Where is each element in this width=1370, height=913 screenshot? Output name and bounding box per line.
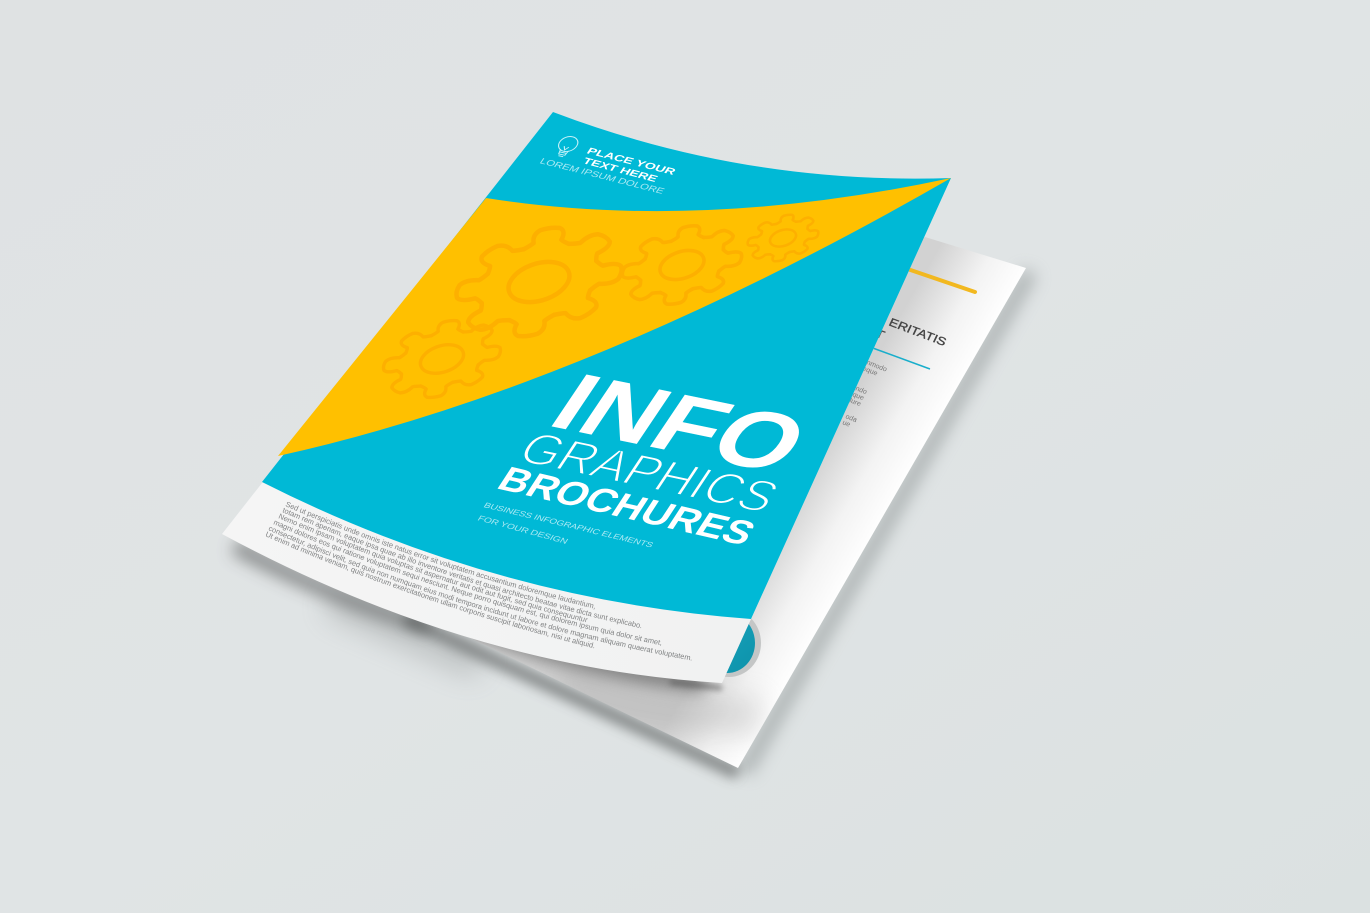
- panel: front sheet: [222, 112, 951, 683]
- floor shadows: [235, 272, 1030, 773]
- panel: back sheet: [474, 237, 1026, 768]
- small text fragments: ut.: [895, 280, 901, 287]
- heading fragment: [873, 317, 948, 349]
- body copy: Ut enim ad minima veniam, quis nostrum exercitationem ullam corporis suscipit laboriosam, nisi ut aliquid.: [266, 532, 594, 648]
- gear: lower left: [382, 319, 502, 399]
- small text fragments: ndo: [854, 385, 868, 396]
- small text fragments: nmodo: [865, 359, 888, 374]
- title: [490, 358, 825, 553]
- heading fragment: ERITATIS: [887, 317, 948, 349]
- small text fragments: lure: [848, 397, 862, 408]
- body copy: consectetur, adipisci velit, sed quia non numquam eius modi tempora incidunt ut labore et dolore magnam aliquam quaerat voluptatem.: [268, 527, 692, 660]
- subtitle: FOR YOUR DESIGN: [476, 514, 570, 545]
- small text fragments: eque: [861, 365, 879, 377]
- header text: PLACE YOUR: [584, 146, 677, 177]
- cover blue area: [262, 112, 951, 619]
- header text: [538, 146, 677, 196]
- gear: medium: [622, 224, 744, 306]
- body copy: magni dolores eos qui ratione voluptatem sequi nesciunt. Neque porro quisquam est, qui dolorem ipsum quia dolor sit amet,: [274, 520, 662, 646]
- body copy: Sed ut perspiciatis unde omnis iste natus error sit voluptatem accusantium doloremque laudantium,: [286, 502, 595, 610]
- header text: LOREM IPSUM DOLORE: [538, 156, 666, 196]
- body copy: Nemo enim ipsam voluptatem quia voluptas sit aspernatur aut odit aut fugit, sed quia consequuntur: [278, 514, 588, 622]
- small text fragments: que: [851, 391, 865, 402]
- yellow swoosh band: [278, 178, 951, 456]
- icon: light bulb: [552, 135, 581, 158]
- title: GRAPHICS: [509, 423, 789, 522]
- small text fragments: ue: [841, 419, 851, 429]
- heading fragment: T: [873, 328, 887, 342]
- shadow cast by front sheet: [471, 638, 768, 743]
- gears: [382, 214, 820, 399]
- brochure mockup scene: [222, 112, 1040, 786]
- title: INFO: [534, 358, 825, 490]
- gear: small: [746, 214, 820, 262]
- sheet paper and white footer strip: [222, 112, 951, 683]
- small text fragments: [841, 280, 901, 429]
- gear: large: [454, 226, 623, 338]
- small text fragments: oda: [844, 413, 858, 424]
- accent line: blue: [870, 347, 930, 369]
- header text: TEXT HERE: [580, 156, 660, 185]
- body copy: totam rem aperiam, eaque ipsa quae ab illo inventore veritatis et quasi architecto beatae vitae dicta sunt explicabo.: [282, 508, 642, 628]
- icon: teal die-cut circle: [697, 609, 761, 677]
- accent bar: yellow: [890, 263, 975, 292]
- subtitle: BUSINESS INFOGRAPHIC ELEMENTS: [482, 501, 655, 549]
- title: BROCHURES: [490, 460, 763, 553]
